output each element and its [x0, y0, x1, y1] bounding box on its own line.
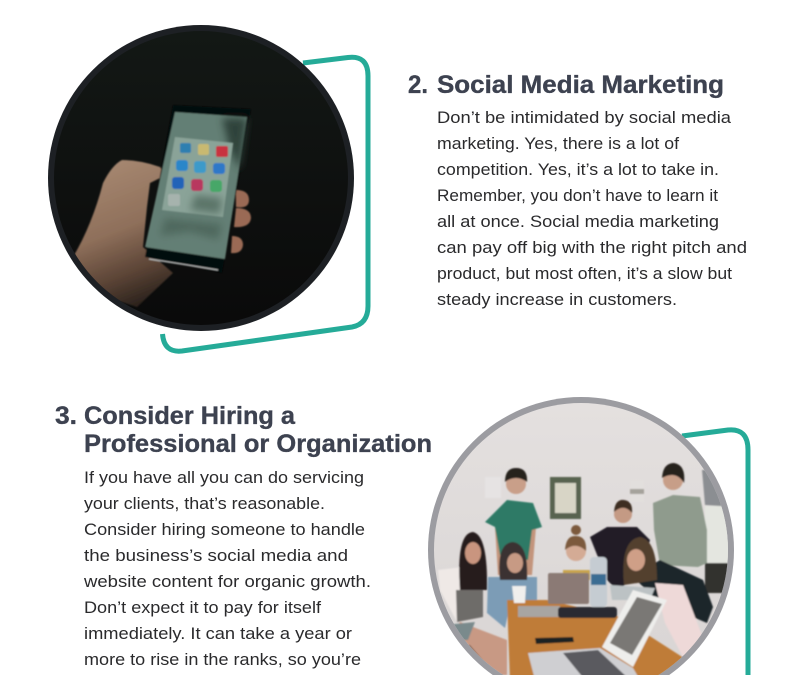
woman in center [563, 570, 590, 580]
front laptop [602, 590, 667, 667]
circular photo: team around a table [428, 397, 735, 675]
hand [74, 159, 173, 308]
section 2: social media marketing [48, 25, 747, 351]
woman with jacket [633, 560, 713, 623]
teal frame behind phone photo [162, 57, 368, 351]
woman with glasses and blue shirt [487, 577, 537, 628]
app icons [168, 143, 228, 206]
body text: social media marketing: product, but most often, it’s a slow but [437, 264, 732, 283]
standing woman in dark top [590, 527, 650, 590]
heading: consider hiring a professional [55, 402, 432, 458]
app folder [162, 137, 233, 217]
section 3: consider hiring a professional [55, 397, 748, 675]
body text: social media marketing: marketing. Yes, there is a lot of [437, 134, 679, 153]
body text: consider hiring a professional: Don’t expect it to pay for itself [84, 598, 321, 617]
laptop back [548, 573, 589, 604]
woman on left [438, 566, 462, 622]
standing man with gray sweater [653, 495, 707, 567]
table [507, 600, 687, 675]
fingers [231, 190, 251, 253]
body text: consider hiring a professional: your clients, that’s reasonable. [84, 494, 325, 513]
body text: consider hiring a professional: the business’s social media and [84, 546, 348, 565]
body text: social media marketing [437, 108, 747, 309]
circular photo: hand holding phone [48, 25, 354, 331]
heading: consider hiring a professional: 3. [55, 402, 77, 430]
teal frame behind team photo [682, 430, 748, 675]
heading: consider hiring a professional: Professional or Organization [84, 430, 432, 458]
body text: consider hiring a professional: immediately. It can take a year or [84, 624, 352, 643]
heading: consider hiring a professional: Consider Hiring a [84, 402, 296, 430]
black device [558, 607, 617, 618]
chair and floor shading [468, 644, 482, 659]
body text: consider hiring a professional: If you have all you can do servicing [84, 468, 364, 487]
heading: social media marketing: 2. [408, 71, 428, 99]
heading: social media marketing: Social Media Marketing [437, 71, 724, 99]
window [701, 469, 722, 507]
body text: social media marketing: all at once. Social media marketing [437, 212, 719, 231]
cups [512, 586, 526, 603]
body text: consider hiring a professional: more to rise in the ranks, so you’re [84, 650, 361, 669]
pink laptop [655, 583, 703, 657]
body text: social media marketing: Remember, you don’t have to learn it [437, 186, 718, 205]
body text: social media marketing: steady increase in customers. [437, 290, 677, 309]
phone screen [145, 112, 247, 259]
wall sconces and picture [485, 477, 501, 498]
body text: social media marketing: can pay off big with the right pitch and [437, 238, 747, 257]
body text: consider hiring a professional: Consider hiring someone to handle [84, 520, 365, 539]
standing man with green shirt [495, 527, 536, 575]
body text: consider hiring a professional [83, 468, 371, 669]
body text: social media marketing: competition. Yes, it’s a lot to take in. [437, 160, 719, 179]
body text: consider hiring a professional: website content for organic growth. [83, 572, 371, 591]
water bottle [590, 557, 607, 607]
phone body [145, 105, 251, 273]
phone on table [535, 637, 574, 644]
body text: social media marketing: Don’t be intimidated by social media [437, 108, 732, 127]
phone bottom strip [149, 259, 218, 270]
